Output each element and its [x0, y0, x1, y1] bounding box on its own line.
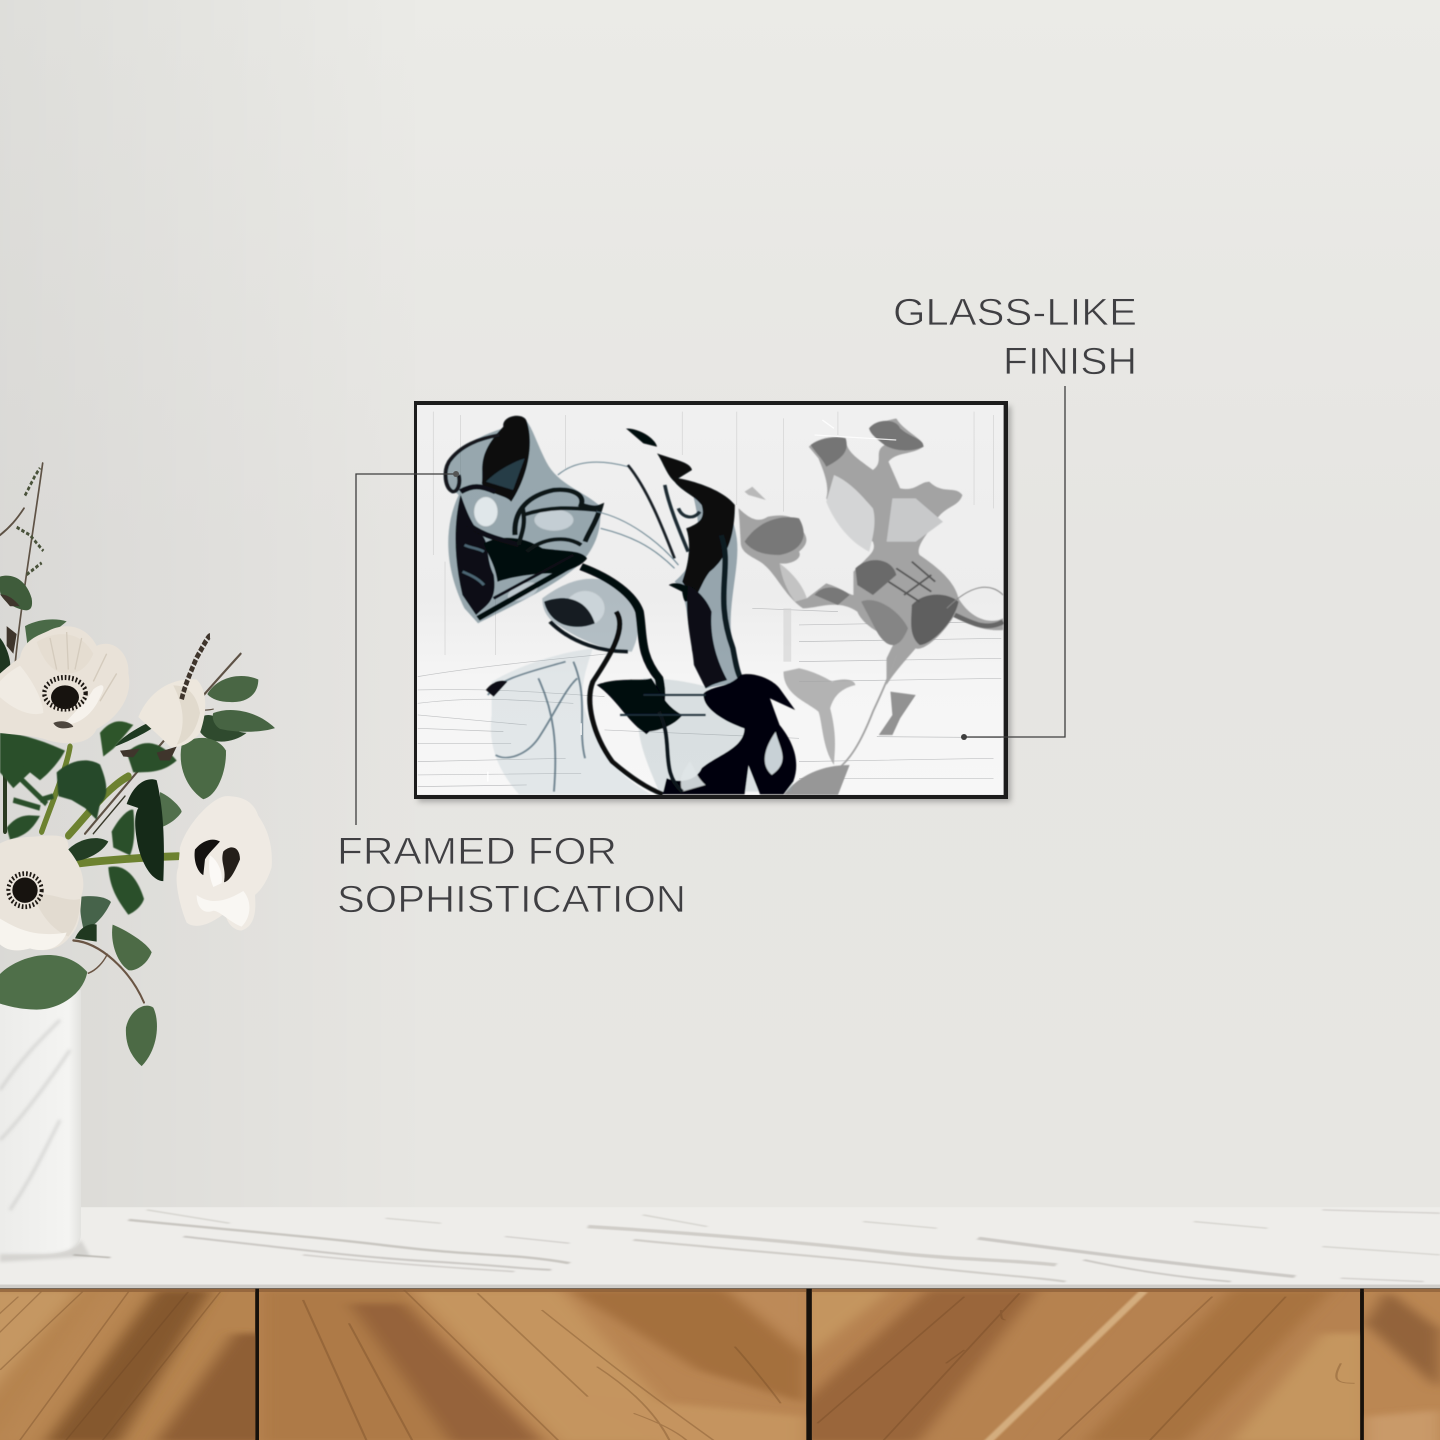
- anemone flower: lower left: [0, 836, 83, 950]
- highlights inside veil: [474, 497, 498, 526]
- wooden cabinet: [0, 1288, 1440, 1440]
- brush strokes: [418, 412, 1001, 787]
- callout dot: [453, 471, 459, 477]
- marble vase: [0, 990, 90, 1262]
- art canvas: [417, 405, 1004, 795]
- callout: glass-like finish: [893, 292, 1137, 740]
- callout label: [337, 831, 686, 921]
- cabinet door 3: [799, 1289, 1368, 1440]
- stems and twigs: [0, 463, 241, 1002]
- callout label: SOPHISTICATION: [337, 879, 686, 921]
- callout label: FRAMED FOR: [337, 831, 617, 873]
- S band: [581, 567, 661, 732]
- black frame: [414, 401, 1008, 799]
- framed artwork: [414, 401, 1011, 802]
- translucent veils: [445, 418, 601, 623]
- leaves: [0, 576, 275, 1066]
- callout label: GLASS-LIKE: [893, 292, 1137, 334]
- leader line: [356, 474, 456, 825]
- mid figure: [626, 428, 657, 447]
- anemone flower: right: [177, 796, 272, 931]
- callout: framed for sophistication: [337, 471, 686, 921]
- callout label: [893, 292, 1137, 383]
- marble countertop: [0, 1207, 1440, 1288]
- anemone flower: upper left: [0, 626, 129, 743]
- glare lines: [488, 420, 896, 782]
- callout label: FINISH: [1003, 341, 1137, 383]
- fern foliage: [0, 721, 177, 915]
- left figure dark: [482, 416, 530, 502]
- green stems: [42, 747, 178, 863]
- grey ink figure: [739, 418, 1003, 795]
- leader line: [964, 386, 1065, 737]
- frame shadow: [418, 406, 1011, 802]
- dark ink figures: [445, 416, 796, 794]
- cabinet door 1: [0, 1289, 276, 1440]
- callout dot: [961, 734, 967, 740]
- cabinet door 4: [1364, 1289, 1440, 1440]
- flower bouquet: [0, 463, 275, 1066]
- twig buds: [0, 468, 210, 761]
- cabinet door 2: [259, 1289, 806, 1440]
- anemone bud: [138, 679, 205, 747]
